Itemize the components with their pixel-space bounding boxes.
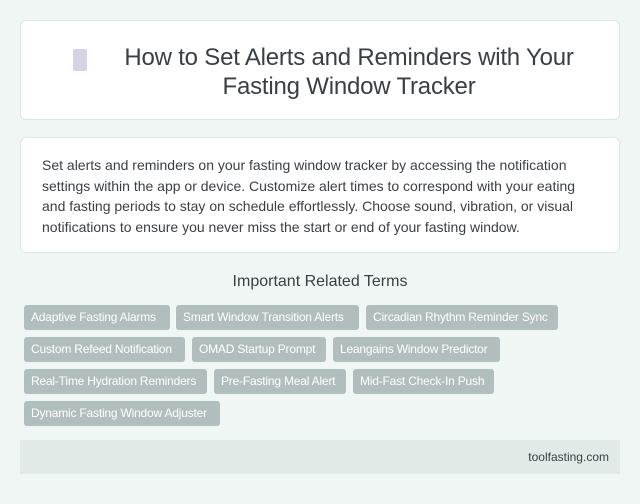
description text: settings within the app or device. Customize alert times to correspond with your eating [42,178,575,194]
tags: Circadian Rhythm Reminder Sync [373,310,548,324]
tags: Smart Window Transition Alerts [183,310,344,324]
related terms heading: Important Related Terms [233,273,407,290]
tags: Custom Refeed Notification [31,342,172,356]
tags: Real-Time Hydration Reminders [31,374,196,388]
description panel [20,137,620,253]
title: How to Set Alerts and Reminders with Your Fasting Window Tracker [124,44,574,100]
tags: Adaptive Fasting Alarms [31,310,156,324]
icon: document [73,49,87,71]
description text: notifications to ensure you never miss the start or end of your fasting window. [42,218,520,234]
description text [42,157,575,235]
footer: toolfasting.com [528,450,609,464]
tags: OMAD Startup Prompt [199,342,315,356]
header panel [20,20,620,120]
tags: Pre-Fasting Meal Alert [221,374,335,388]
tags: Dynamic Fasting Window Adjuster [31,406,207,420]
footer [20,440,620,474]
description text: Set alerts and reminders on your fasting window tracker by accessing the notification [42,157,566,173]
description text: and fasting periods to stay on schedule effortlessly. Choose sound, vibration, or visual [42,198,573,214]
tags: Mid-Fast Check-In Push [360,374,484,388]
tags: Leangains Window Predictor [340,342,488,356]
